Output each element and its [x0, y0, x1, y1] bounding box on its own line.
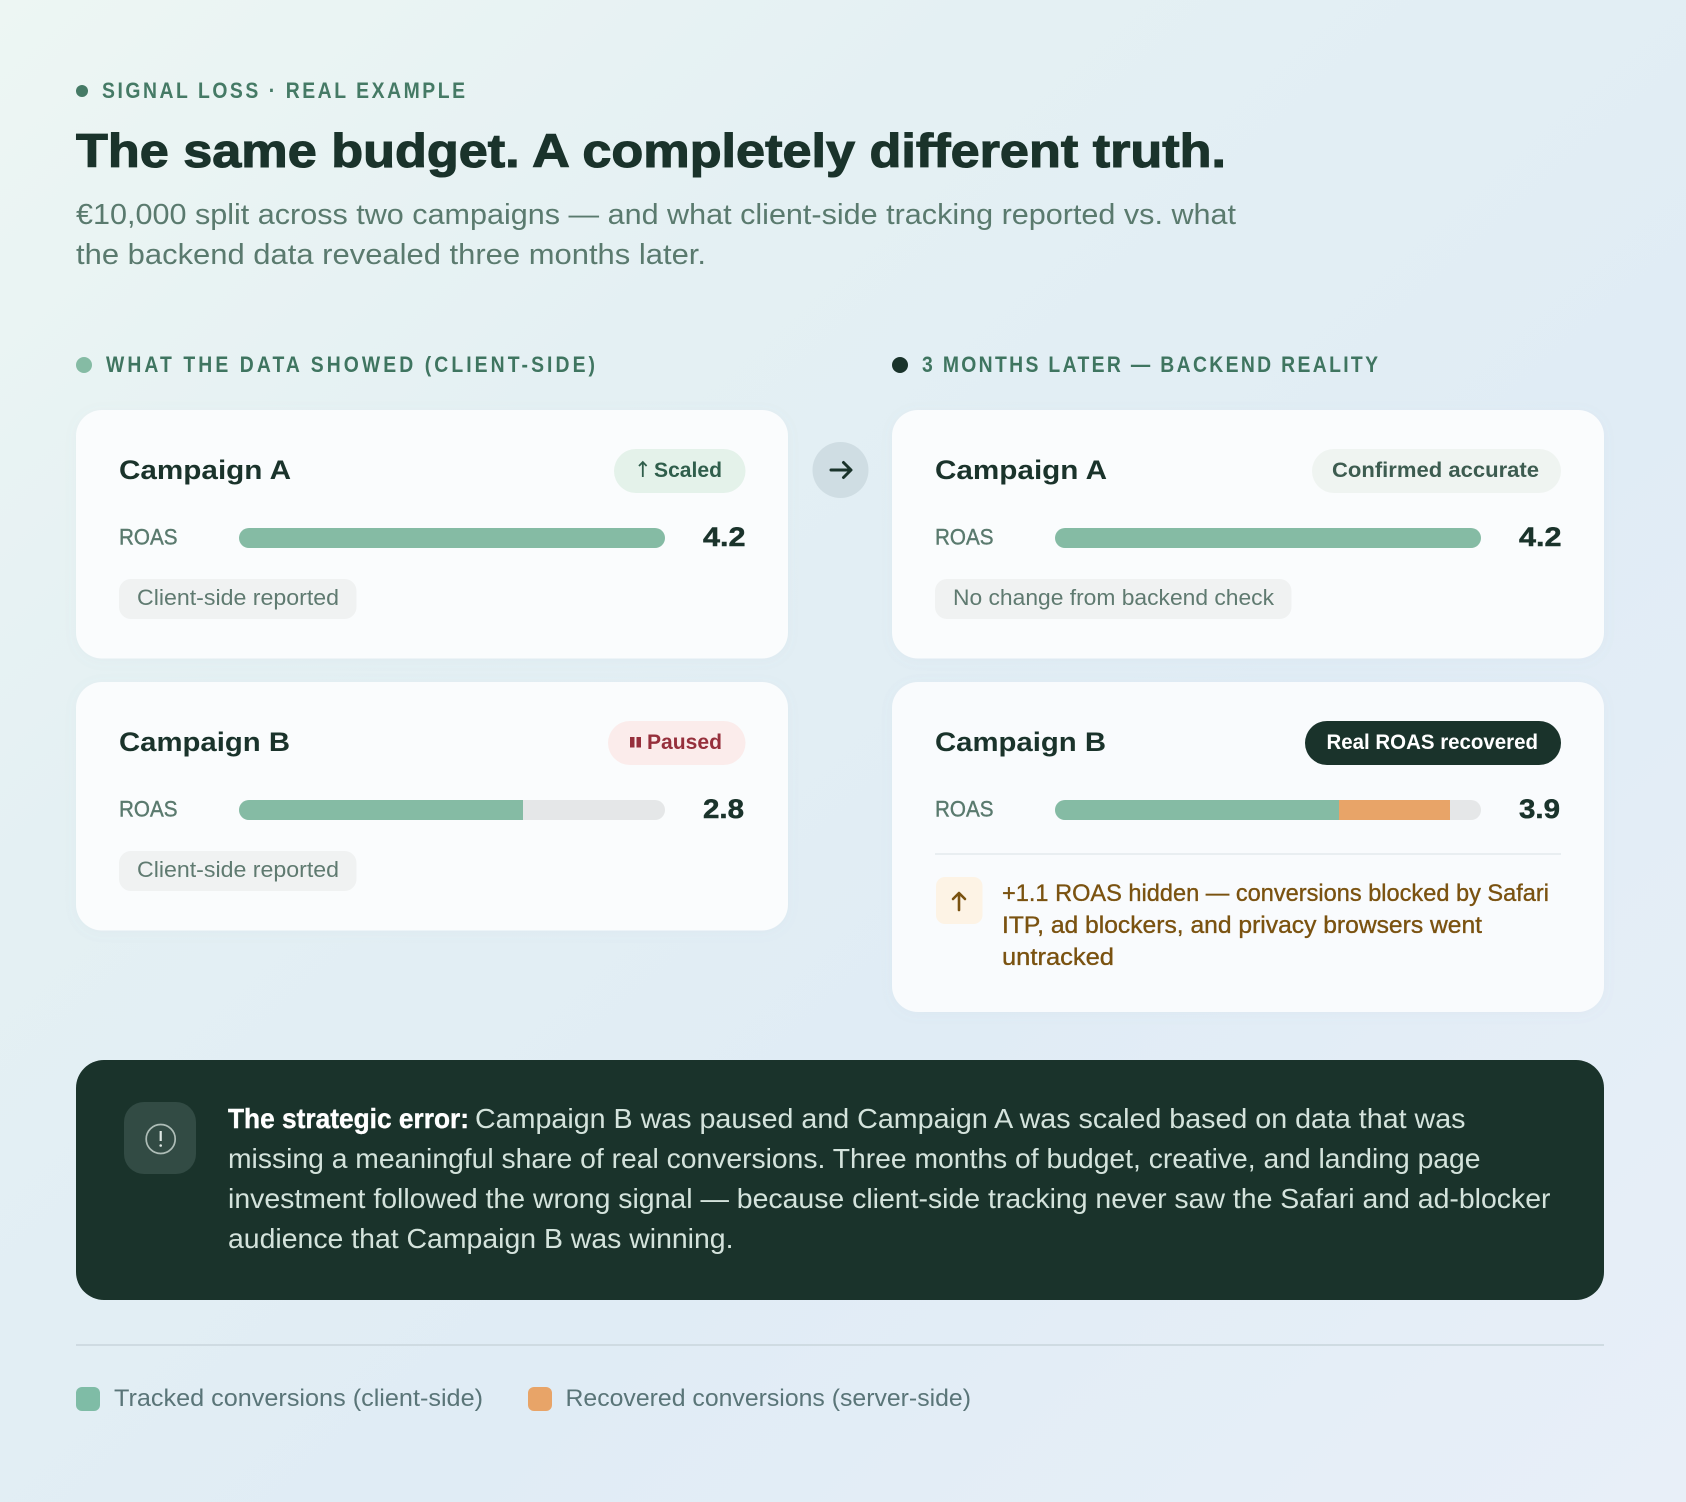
panel: client-side campaign A [76, 410, 788, 658]
panel: client-side campaign B [76, 682, 788, 930]
badge: paused [608, 721, 746, 765]
legend item: tracked conversions: Tracked conversions (client-side) [114, 1385, 483, 1412]
tag: client-side reported [119, 579, 356, 619]
panel: backend campaign A [892, 410, 1604, 658]
tag: no change: No change from backend check [953, 585, 1275, 610]
panel: backend campaign A: 4.2 [1519, 522, 1562, 552]
badge: confirmed accurate: Confirmed accurate [1332, 458, 1539, 482]
ROAS bar 2.8 [239, 800, 665, 820]
text: strategic error explanation [228, 1103, 1550, 1254]
eyebrow: signal loss: SIGNAL LOSS · REAL EXAMPLE [102, 79, 465, 103]
column heading: client-side: WHAT THE DATA SHOWED (CLIENT-SIDE) [106, 353, 595, 377]
panel: client-side campaign B: 2.8 [703, 794, 744, 824]
panel: backend campaign A: ROAS [935, 524, 994, 550]
tag: no change [935, 579, 1292, 619]
panel: backend campaign B: ROAS [935, 796, 994, 822]
text: strategic error explanation: audience that Campaign B was winning. [228, 1223, 734, 1254]
text: strategic error explanation: Campaign B was paused and Campaign A was scaled based on data that was [475, 1103, 1466, 1134]
icon: warning [124, 1102, 196, 1174]
panel: strategic error [76, 1060, 1604, 1300]
text: strategic error explanation: missing a meaningful share of real conversions. Three months of budget, creative, and landing page [228, 1143, 1481, 1174]
ROAS bar 4.2 [1055, 528, 1481, 548]
callout: hidden ROAS: ITP, ad blockers, and privacy browsers went [1002, 912, 1482, 939]
subtitle: €10,000 split across two campaigns — and what client-side tracking reported vs. what [76, 199, 1236, 231]
arrow: client-side to backend [812, 442, 868, 498]
panel: client-side campaign B: Campaign B [119, 727, 290, 757]
legend [76, 1385, 971, 1412]
panel: backend campaign B [892, 682, 1604, 1012]
badge: confirmed accurate [1312, 449, 1561, 493]
panel: backend campaign A: Campaign A [935, 455, 1107, 485]
tag: client-side reported: Client-side reported [137, 585, 339, 610]
callout: hidden ROAS [1002, 880, 1549, 971]
panel: client-side campaign A: ROAS [119, 524, 178, 550]
title: The same budget. A completely different truth. [76, 124, 1226, 177]
callout: hidden ROAS: +1.1 ROAS hidden — conversions blocked by Safari [1002, 880, 1549, 907]
legend item: recovered conversions: Recovered conversions (server-side) [566, 1385, 971, 1412]
badge: scaled: Scaled [654, 458, 722, 482]
callout: hidden ROAS: untracked [1002, 944, 1114, 971]
text: strategic error explanation: The strategic error: [228, 1103, 469, 1134]
text: strategic error explanation: investment followed the wrong signal — because client-side tracking never saw the Safari and ad-blocker [228, 1183, 1550, 1214]
badge: scaled [614, 449, 746, 493]
panel: backend campaign B: Campaign B [935, 727, 1106, 757]
subtitle: the backend data revealed three months later. [76, 239, 706, 271]
ROAS stacked bar 3.9 [1055, 800, 1481, 820]
panel: backend campaign B: 3.9 [1519, 794, 1560, 824]
tag: client-side reported [119, 851, 356, 891]
column heading: backend reality: 3 MONTHS LATER — BACKEND REALITY [922, 353, 1378, 377]
panel: client-side campaign A: Campaign A [119, 455, 291, 485]
tag: client-side reported: Client-side reported [137, 857, 339, 882]
subtitle [76, 199, 1236, 271]
ROAS bar 4.2 [239, 528, 665, 548]
panel: client-side campaign A: 4.2 [703, 522, 746, 552]
badge: real ROAS recovered [1305, 721, 1561, 765]
badge: paused: Paused [647, 730, 722, 754]
icon: up arrow [936, 877, 982, 924]
panel: client-side campaign B: ROAS [119, 796, 178, 822]
badge: real ROAS recovered: Real ROAS recovered [1326, 730, 1538, 754]
